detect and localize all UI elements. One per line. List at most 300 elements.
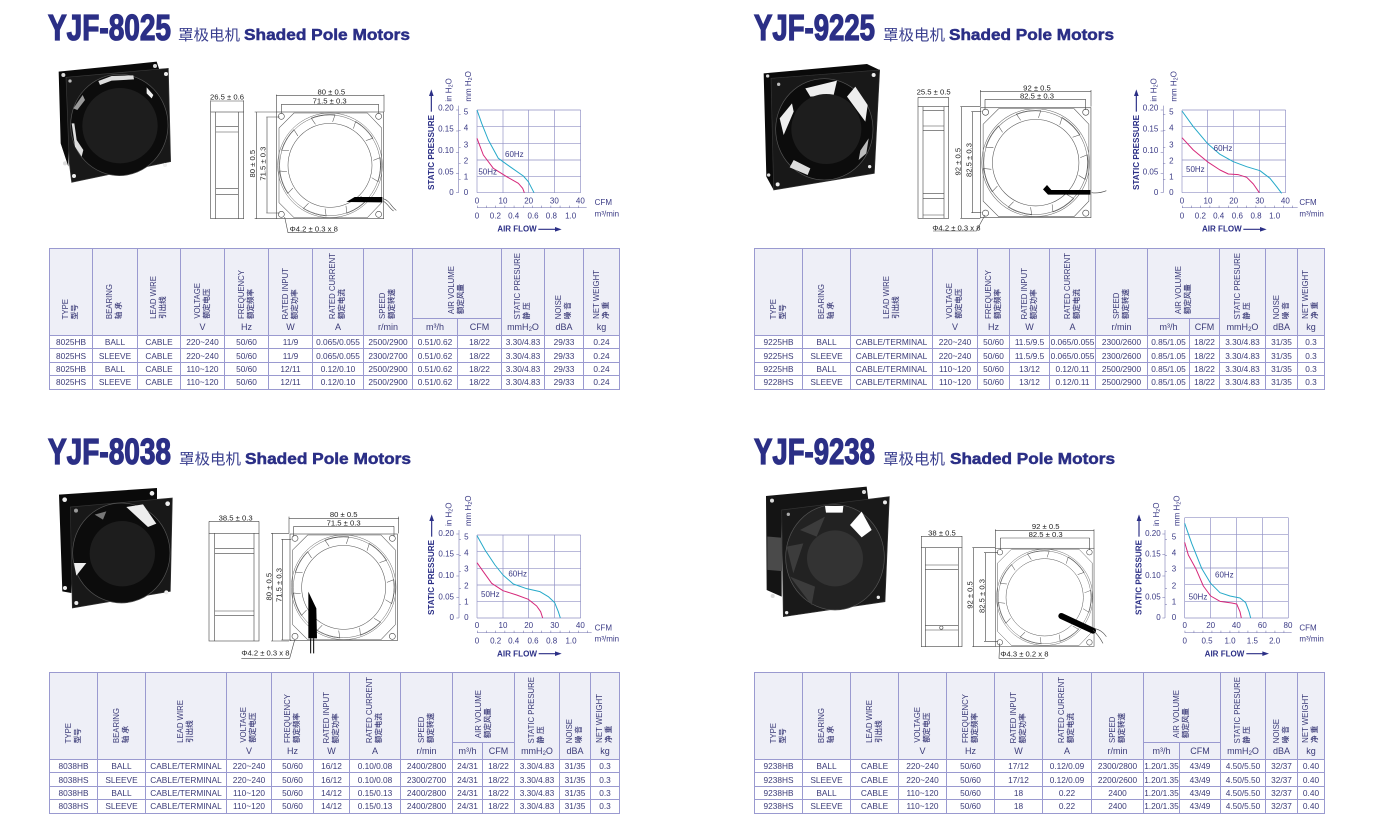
chart: 8038 air flow vs static pressure: O [464, 495, 473, 502]
table: 8038 specifications: LEAD WIRE [176, 700, 185, 743]
chart: 8025 air flow vs static pressure: 0.10 [438, 146, 454, 155]
table: 9238 specifications: 43/49 [1190, 775, 1210, 785]
chart: 9225 air flow vs static pressure: CFM [1299, 198, 1317, 207]
table: 8025 specifications: SLEEVE [99, 377, 131, 387]
table: 9238 specifications: CFM [1190, 746, 1210, 756]
table: 9238 specifications: BALL [816, 788, 837, 798]
table: 9238 specifications: RATED CURRENT [1057, 677, 1066, 743]
table: 9225 specifications: STATIC PRESURE [1232, 253, 1242, 319]
chart: 8038 air flow vs static pressure: O [444, 503, 453, 509]
chart: 9225 air flow vs static pressure: 0 [1154, 188, 1159, 197]
table: 9225 specifications: 0.3 [1305, 364, 1317, 374]
table: 8025 specifications: 噪 音 [563, 302, 572, 319]
table: 8025 specifications: 额定功率 [290, 289, 298, 319]
chart: 8025 air flow vs static pressure [427, 71, 619, 234]
table: 9238 specifications: 0.40 [1303, 761, 1319, 771]
chart: 8025 air flow vs static pressure: CFM [595, 198, 612, 207]
table: 8038 specifications: 0.3 [599, 788, 611, 798]
table: 8038 specifications: TYPE [64, 723, 72, 743]
table: 9238 specifications: BEARING [816, 708, 826, 743]
table: 8025 specifications: 110~120 [187, 377, 218, 387]
table: 8025 specifications: 3.30/4.83 [506, 351, 540, 361]
table: 9238 specifications: V [919, 746, 926, 756]
table: 8038 specifications: mmH2O [521, 746, 553, 757]
table: 8038 specifications: 31/35 [565, 761, 585, 771]
table: 8025 specifications: 0.24 [593, 337, 610, 347]
chart: 9225 air flow vs static pressure: 0.05 [1143, 167, 1159, 176]
table: 8025 specifications: dBA [555, 322, 572, 332]
table: 8025 specifications: kg [597, 322, 606, 332]
table: 8025 specifications [49, 248, 620, 390]
table: 9225 specifications: 0.065/0.055 [1051, 337, 1094, 347]
table: 8025 specifications: CABLE [145, 351, 173, 361]
table: 9225 specifications: 3.30/4.83 [1225, 364, 1260, 374]
table: 9225 specifications: 31/35 [1271, 377, 1292, 387]
chart: 9225 air flow vs static pressure: 0.2 [1195, 212, 1206, 221]
table: 9225 specifications: 31/35 [1271, 364, 1292, 374]
table: 9225 specifications: 9228HS [764, 377, 793, 387]
table: 8025 specifications: VOLTAGE [192, 283, 202, 319]
table: 9238 specifications: 50/60 [960, 761, 981, 771]
table: 9238 specifications: 4.50/5.50 [1226, 788, 1260, 798]
table: 9225 specifications: AIR VOLUME [1174, 266, 1182, 314]
table: 8025 specifications: 静 压 [522, 302, 531, 319]
table: 8025 specifications: 0.065/0.055 [316, 337, 360, 347]
table: 8038 specifications: 额定功率 [330, 713, 340, 743]
chart: 8025 air flow vs static pressure: 0.05 [438, 167, 454, 176]
title: YJF-9225 Shaded Pole Motors: YJF-9225 [754, 7, 875, 48]
table: 9238 specifications: 0.40 [1303, 775, 1319, 785]
chart: 8038 air flow vs static pressure: 30 [550, 621, 560, 630]
table: 9225 specifications: NOISE [1272, 295, 1280, 319]
table: 8025 specifications: CFM [470, 322, 489, 332]
chart: 8038 air flow vs static pressure: 0.05 [438, 592, 455, 601]
table: 9238 specifications: 4.50/5.50 [1226, 801, 1260, 811]
dimension drawing: 9225: 25.5 ± 0.5 [917, 88, 951, 97]
chart: 9225 air flow vs static pressure: 40 [1281, 196, 1290, 205]
table: 9238 specifications: RATED INPUT [1008, 692, 1018, 743]
table: 8025 specifications: 0.12/0.10 [321, 377, 355, 387]
table: 8038 specifications: 0.10/0.08 [358, 775, 392, 785]
table: 9238 specifications: SPEED [1108, 717, 1116, 743]
table: 9238 specifications: 0.12/0.09 [1050, 761, 1084, 771]
table: 9225 specifications: 31/35 [1271, 337, 1292, 347]
chart: 9238 air flow vs static pressure: 1.0 [1224, 637, 1236, 646]
dimension drawing: 9225: 82.5 ± 0.3 [1020, 91, 1054, 100]
table: 8025 specifications: FREQUENCY [236, 270, 246, 319]
table: 8025 specifications: NET WEIGHT [592, 270, 600, 319]
table: 8038 specifications: 220~240 [233, 761, 265, 771]
chart: 8025 air flow vs static pressure: 0 [475, 196, 480, 205]
table: 8025 specifications: CABLE [145, 337, 173, 347]
title: YJF-9238 Shaded Pole Motors [754, 431, 1115, 472]
table: 8025 specifications: 额定电压 [202, 289, 210, 319]
table: 9225 specifications: 31/35 [1271, 351, 1292, 361]
table: 8038 specifications: RATED CURRENT [365, 677, 374, 743]
table: 8025 specifications: 0.24 [593, 364, 610, 374]
title: YJF-8038 Shaded Pole Motors: 罩极电机 [179, 451, 241, 468]
dimension drawing: 9238 [921, 522, 1106, 659]
table: 9238 specifications: 43/49 [1190, 788, 1210, 798]
table: 8025 specifications: LEAD WIRE [149, 276, 158, 319]
chart: 8038 air flow vs static pressure: 0 [475, 637, 480, 646]
table: 9225 specifications: 50/60 [983, 337, 1004, 347]
chart: 8038 air flow vs static pressure: 2 [464, 581, 469, 590]
chart: 8038 air flow vs static pressure: STATIC PRESSURE [427, 539, 436, 615]
table: 8025 specifications: r/min [378, 322, 398, 332]
table: 8038 specifications: 110~120 [233, 801, 265, 811]
chart: 8038 air flow vs static pressure: 0.8 [546, 637, 558, 646]
table: 9238 specifications: 2200/2600 [1098, 775, 1137, 785]
chart: 9225 air flow vs static pressure: 0.8 [1250, 212, 1262, 221]
chart: 9225 air flow vs static pressure: 1.0 [1269, 212, 1281, 221]
table: 8025 specifications: AIR VOLUME [447, 266, 456, 314]
table: 8038 specifications: 额定电流 [374, 713, 383, 743]
table: 9225 specifications: CABLE/TERMINAL [856, 364, 927, 374]
chart: 8025 air flow vs static pressure: 2 [468, 77, 474, 80]
table: 8025 specifications: 11/9 [283, 351, 298, 361]
panel: YJF-8025 [48, 7, 620, 390]
dimension drawing: 8025: Φ4.2 ± 0.3 x 8 [290, 224, 338, 233]
table: 8025 specifications: 0.51/0.62 [418, 377, 452, 387]
table: 8038 specifications: RATED INPUT [322, 692, 330, 743]
dimension drawing: 8038: 71.5 ± 0.3 [327, 518, 361, 527]
table: 9225 specifications: 2300/2600 [1102, 351, 1141, 361]
table: 9225 specifications: 0.85/1.05 [1151, 364, 1186, 374]
chart: 9225 air flow vs static pressure: 0.6 [1232, 212, 1243, 221]
chart: 8038 air flow vs static pressure: 0 [450, 613, 455, 622]
table: 8025 specifications: m³/h [426, 322, 444, 332]
chart: 9238 air flow vs static pressure: 0 [1182, 637, 1187, 646]
chart: 9225 air flow vs static pressure: mm H [1170, 80, 1179, 102]
chart: 9238 air flow vs static pressure: 2 [1156, 509, 1162, 512]
table: 9238 specifications: dBA [1273, 746, 1290, 756]
chart: 9238 air flow vs static pressure: AIR FLOW [1205, 649, 1245, 658]
chart: 9225 air flow vs static pressure: O [1150, 78, 1159, 84]
table: 8025 specifications: 110~120 [187, 364, 218, 374]
table: 8038 specifications: 净 重 [604, 726, 613, 743]
chart: 8038 air flow vs static pressure: CFM [595, 623, 612, 632]
table: 8025 specifications: 型号 [70, 304, 79, 319]
table: 9238 specifications: 1.20/1.35 [1144, 788, 1179, 798]
title: YJF-9225 Shaded Pole Motors [754, 7, 1114, 48]
table: 9238 specifications: 净 重 [1310, 726, 1319, 743]
chart: 9238 air flow vs static pressure: 4 [1172, 549, 1177, 558]
table: 8038 specifications: 型号 [72, 728, 82, 743]
table: 9225 specifications: NET WEIGHT [1301, 270, 1310, 319]
table: 8025 specifications: NOISE [554, 295, 563, 319]
table: 8038 specifications: CABLE/TERMINAL [150, 761, 222, 771]
table: 8038 specifications: 24/31 [457, 801, 478, 811]
title: YJF-8025 Shaded Pole Motors: 罩极电机 [178, 27, 240, 44]
table: 9225 specifications: 18/22 [1194, 351, 1215, 361]
table: 9225 specifications: 引出线 [890, 296, 900, 319]
table: 8038 specifications: CABLE/TERMINAL [150, 788, 222, 798]
chart: 9225 air flow vs static pressure: 0.10 [1143, 146, 1159, 155]
table: 9225 specifications: TYPE [768, 299, 778, 319]
table: 9225 specifications [754, 248, 1325, 390]
dimension drawing: 9225: 92 ± 0.5 [1024, 83, 1051, 92]
table: 9238 specifications: 50/60 [960, 775, 981, 785]
table: 8025 specifications: 11/9 [283, 337, 298, 347]
chart: 8038 air flow vs static pressure: 3 [464, 565, 469, 574]
chart: 8025 air flow vs static pressure: 3 [464, 140, 469, 149]
chart: 9238 air flow vs static pressure: m³/min [1299, 635, 1324, 644]
table: 8025 specifications: 净 重 [600, 302, 610, 319]
chart: 9225 air flow vs static pressure: 60Hz [1214, 144, 1232, 153]
table: 8038 specifications: 0.3 [599, 801, 611, 811]
dimension drawing: 8038: Φ4.2 ± 0.3 x 8 [242, 649, 290, 658]
table: 9238 specifications: 9238HB [764, 788, 793, 798]
chart: 8038 air flow vs static pressure: 2 [448, 509, 454, 512]
chart: 9238 air flow vs static pressure: 0.05 [1145, 592, 1161, 601]
table: 9225 specifications: 110~120 [939, 364, 971, 374]
chart: 8025 air flow vs static pressure: 0.2 [490, 212, 501, 221]
table: 9238 specifications: 32/37 [1271, 788, 1292, 798]
chart: 8038 air flow vs static pressure: 50Hz [481, 590, 500, 599]
table: 8025 specifications: 12/11 [280, 377, 301, 387]
table: 8038 specifications: 静 压 [536, 726, 545, 743]
table: 9225 specifications: dBA [1273, 322, 1290, 332]
table: 8038 specifications: Hz [287, 746, 298, 756]
table: 9225 specifications: 0.3 [1305, 377, 1317, 387]
dimension drawing: 9225 [917, 83, 1106, 232]
table: 8038 specifications: 噪 音 [574, 726, 583, 743]
table: 8025 specifications: SLEEVE [99, 351, 131, 361]
table: 8038 specifications: 0.3 [599, 761, 611, 771]
chart: 9238 air flow vs static pressure: STATIC PRESSURE [1135, 539, 1144, 615]
chart: 9238 air flow vs static pressure: 0.20 [1145, 529, 1161, 538]
table: 8025 specifications: 3.30/4.83 [506, 337, 540, 347]
table: 9225 specifications: CABLE/TERMINAL [856, 377, 927, 387]
chart: 8038 air flow vs static pressure: 0.15 [438, 549, 455, 558]
table: 9225 specifications: 50/60 [983, 364, 1004, 374]
chart: 9225 air flow vs static pressure: 1 [1169, 172, 1174, 181]
table: 8025 specifications: 0.51/0.62 [418, 351, 452, 361]
chart: 9225 air flow vs static pressure: O [1170, 71, 1179, 77]
table: 9225 specifications: A [1069, 322, 1076, 332]
chart: 8025 air flow vs static pressure: 0 [449, 188, 454, 197]
chart: 8025 air flow vs static pressure: 0.6 [527, 212, 539, 221]
chart: 8038 air flow vs static pressure: AIR FLOW [497, 649, 537, 658]
chart: 9225 air flow vs static pressure: 0.15 [1143, 125, 1159, 134]
table: 9225 specifications: 0.12/0.11 [1056, 364, 1090, 374]
table: 9225 specifications: 9225HS [764, 351, 793, 361]
table: 9238 specifications: STATIC PRESURE [1233, 677, 1242, 743]
chart: 9225 air flow vs static pressure: STATIC PRESSURE [1132, 114, 1141, 190]
photo: 9225 fan [764, 64, 880, 190]
dimension drawing: 8025: 26.5 ± 0.6 [210, 92, 244, 101]
dimension drawing: 9225: 92 ± 0.5 [954, 148, 963, 175]
chart: 8025 air flow vs static pressure: 60Hz [505, 150, 524, 159]
table: 8038 specifications: SLEEVE [105, 801, 138, 811]
table: 8038 specifications: 50/60 [282, 761, 303, 771]
table: 8025 specifications: 18/22 [469, 337, 490, 347]
chart: 8038 air flow vs static pressure: 0.20 [438, 529, 455, 538]
chart: 8038 air flow vs static pressure: 20 [524, 621, 534, 630]
dimension drawing: 8025: 71.5 ± 0.3 [313, 96, 347, 105]
title: YJF-8038 Shaded Pole Motors: YJF-8038 [48, 431, 171, 472]
table: 9225 specifications: 0.065/0.055 [1051, 351, 1094, 361]
dimension drawing: 9238: 92 ± 0.5 [1032, 522, 1060, 531]
chart: 9225 air flow vs static pressure: m³/min [1299, 210, 1324, 219]
table: 9238 specifications: 43/49 [1190, 801, 1210, 811]
panel: YJF-9225 [754, 7, 1325, 390]
chart: 8038 air flow vs static pressure: 0.6 [527, 637, 539, 646]
chart: 8025 air flow vs static pressure: 10 [499, 196, 508, 205]
chart: 8038 air flow vs static pressure: 1.0 [565, 637, 577, 646]
table: 8038 specifications: 额定风量 [482, 708, 492, 738]
chart: 9225 air flow vs static pressure: 4 [1169, 124, 1174, 133]
chart: 8038 air flow vs static pressure: m³/min [595, 635, 619, 644]
chart: 8025 air flow vs static pressure: AIR FLOW [497, 225, 537, 234]
chart: 8025 air flow vs static pressure: 30 [550, 196, 559, 205]
chart: 8025 air flow vs static pressure: 40 [576, 196, 585, 205]
table: 9225 specifications: 13/12 [1019, 377, 1040, 387]
table: 8025 specifications: 220~240 [186, 337, 219, 347]
table: 8038 specifications: 8038HB [58, 761, 88, 771]
chart: 8025 air flow vs static pressure: 0.8 [546, 212, 557, 221]
chart: 9225 air flow vs static pressure: 0 [1180, 196, 1185, 205]
table: 8038 specifications: BALL [111, 761, 132, 771]
table: 9225 specifications: 额定电流 [1072, 289, 1080, 319]
table: 8025 specifications: 50/60 [236, 364, 257, 374]
table: 8038 specifications: 16/12 [321, 761, 342, 771]
table: 9238 specifications: CABLE [861, 788, 888, 798]
table: 8038 specifications: 8038HS [58, 775, 88, 785]
table: 8038 specifications: VOLTAGE [239, 707, 248, 743]
chart: 8038 air flow vs static pressure: in H [444, 512, 453, 526]
chart: 8025 air flow vs static pressure: O [444, 78, 453, 84]
title: YJF-9225 Shaded Pole Motors: Shaded Pole Motors [949, 27, 1114, 44]
table: 8025 specifications: 2500/2900 [368, 364, 408, 374]
table: 9238 specifications: 18 [1014, 788, 1023, 798]
dimension drawing: 9238: Φ4.3 ± 0.2 x 8 [1001, 649, 1049, 658]
table: 9238 specifications: 2400 [1108, 788, 1127, 798]
table: 9225 specifications: 50/60 [983, 377, 1004, 387]
table: 8025 specifications: 29/33 [554, 377, 574, 387]
table: 8038 specifications: CABLE/TERMINAL [150, 801, 222, 811]
chart: 8025 air flow vs static pressure: m³/min [595, 210, 619, 219]
table: 9238 specifications: 1.20/1.35 [1144, 775, 1179, 785]
table: 9238 specifications: SLEEVE [810, 775, 843, 785]
chart: 9238 air flow vs static pressure: 1 [1172, 598, 1177, 607]
table: 8025 specifications: 0.24 [593, 351, 610, 361]
chart: 9225 air flow vs static pressure: 2 [1154, 84, 1160, 87]
dimension drawing: 8038 [208, 510, 399, 659]
table: 9225 specifications: 0.85/1.05 [1151, 351, 1186, 361]
table: 9238 specifications: 50/60 [960, 788, 981, 798]
dimension drawing: 9238: 92 ± 0.5 [966, 581, 975, 609]
chart: 9225 air flow vs static pressure: 2 [1169, 156, 1174, 165]
table: 9238 specifications: 静 压 [1242, 726, 1251, 743]
table: 9225 specifications: 3.30/4.83 [1225, 351, 1260, 361]
table: 8038 specifications: FREQUENCY [282, 694, 292, 743]
table: 8025 specifications: 29/33 [554, 337, 574, 347]
chart: 8025 air flow vs static pressure: 5 [464, 107, 469, 116]
table: 9238 specifications: TYPE [768, 723, 778, 743]
table: 9225 specifications: 0.85/1.05 [1151, 377, 1186, 387]
table: 9225 specifications: 11.5/9.5 [1015, 351, 1044, 361]
table: 8038 specifications: dBA [566, 746, 584, 756]
table: 8038 specifications: 轴 承 [120, 726, 130, 743]
chart: 8025 air flow vs static pressure: 2 [464, 156, 469, 165]
table: 8038 specifications: 110~120 [233, 788, 265, 798]
table: 8038 specifications: 0.15/0.13 [358, 801, 392, 811]
chart: 8038 air flow vs static pressure: 40 [576, 621, 585, 630]
table: 9238 specifications: 额定电压 [922, 713, 930, 743]
table: 9238 specifications: 额定电流 [1066, 713, 1075, 743]
table: 8038 specifications: 50/60 [282, 801, 303, 811]
chart: 9225 air flow vs static pressure: 0 [1169, 188, 1174, 197]
table: 9238 specifications: Hz [965, 746, 976, 756]
table: 8025 specifications: BALL [105, 337, 125, 347]
table: 8025 specifications: 额定电流 [337, 289, 346, 319]
table: 8025 specifications: 0.51/0.62 [418, 364, 452, 374]
table: 8025 specifications: 8025HS [56, 351, 86, 361]
table: 8025 specifications: 18/22 [469, 377, 490, 387]
table: 9225 specifications: kg [1306, 322, 1316, 332]
table: 9225 specifications: BEARING [816, 284, 826, 319]
chart: 9238 air flow vs static pressure: 40 [1232, 621, 1241, 630]
table: 9238 specifications: 1.20/1.35 [1144, 801, 1179, 811]
table: 8038 specifications: V [246, 746, 252, 756]
chart: 9238 air flow vs static pressure: 5 [1172, 532, 1177, 541]
table: 8038 specifications: 14/12 [321, 788, 342, 798]
table: 9238 specifications: 0.12/0.09 [1050, 775, 1084, 785]
chart: 8038 air flow vs static pressure: 0 [475, 621, 480, 630]
chart: 9238 air flow vs static pressure: 1.5 [1247, 637, 1258, 646]
table: 8025 specifications: 2300/2700 [368, 351, 408, 361]
chart: 9238 air flow vs static pressure [1135, 495, 1324, 658]
chart: 9238 air flow vs static pressure: 3 [1172, 565, 1177, 574]
table: 8025 specifications: CABLE [145, 364, 173, 374]
chart: 8038 air flow vs static pressure: 0.4 [508, 637, 520, 646]
table: 8038 specifications: 2300/2700 [407, 775, 446, 785]
table: 8025 specifications: RATED INPUT [280, 268, 290, 319]
table: 8038 specifications: 0.10/0.08 [358, 761, 392, 771]
table: 8038 specifications: 31/35 [565, 775, 585, 785]
dimension drawing: 8025 [210, 87, 396, 233]
table: 9238 specifications: CABLE [861, 775, 888, 785]
table: 9238 specifications: 额定频率 [970, 713, 978, 743]
table: 9225 specifications: 额定频率 [992, 289, 1002, 319]
table: 8038 specifications: 14/12 [321, 801, 342, 811]
table: 9238 specifications: 额定转速 [1116, 713, 1126, 743]
table: 9238 specifications: BALL [816, 761, 837, 771]
title: YJF-9238 Shaded Pole Motors: Shaded Pole Motors [950, 451, 1115, 468]
table: 8025 specifications: 8025HS [56, 377, 86, 387]
table: 8038 specifications: 2400/2800 [407, 788, 446, 798]
table: 9238 specifications: 110~120 [907, 788, 938, 798]
table: 9225 specifications: 净 重 [1310, 302, 1319, 319]
chart: 8025 air flow vs static pressure: in H [444, 87, 453, 102]
chart: 9225 air flow vs static pressure: 0.4 [1213, 212, 1225, 221]
title: YJF-9225 Shaded Pole Motors: 罩极电机 [883, 27, 945, 44]
table: 9238 specifications: 32/37 [1271, 761, 1292, 771]
chart: 9238 air flow vs static pressure: O [1152, 503, 1161, 509]
table: 8025 specifications: RATED CURRENT [328, 253, 337, 319]
table: 8025 specifications: 18/22 [469, 351, 490, 361]
table: 8025 specifications: 220~240 [186, 351, 219, 361]
table: 9225 specifications: CFM [1195, 322, 1214, 332]
table: 8038 specifications: CFM [489, 746, 508, 756]
chart: 9238 air flow vs static pressure: 2 [1172, 581, 1177, 590]
table: 9225 specifications: mmH2O [1227, 322, 1258, 333]
table: 9225 specifications: 13/12 [1019, 364, 1040, 374]
photo: 8025 fan [58, 62, 171, 183]
chart: 9225 air flow vs static pressure: in H [1150, 87, 1159, 102]
